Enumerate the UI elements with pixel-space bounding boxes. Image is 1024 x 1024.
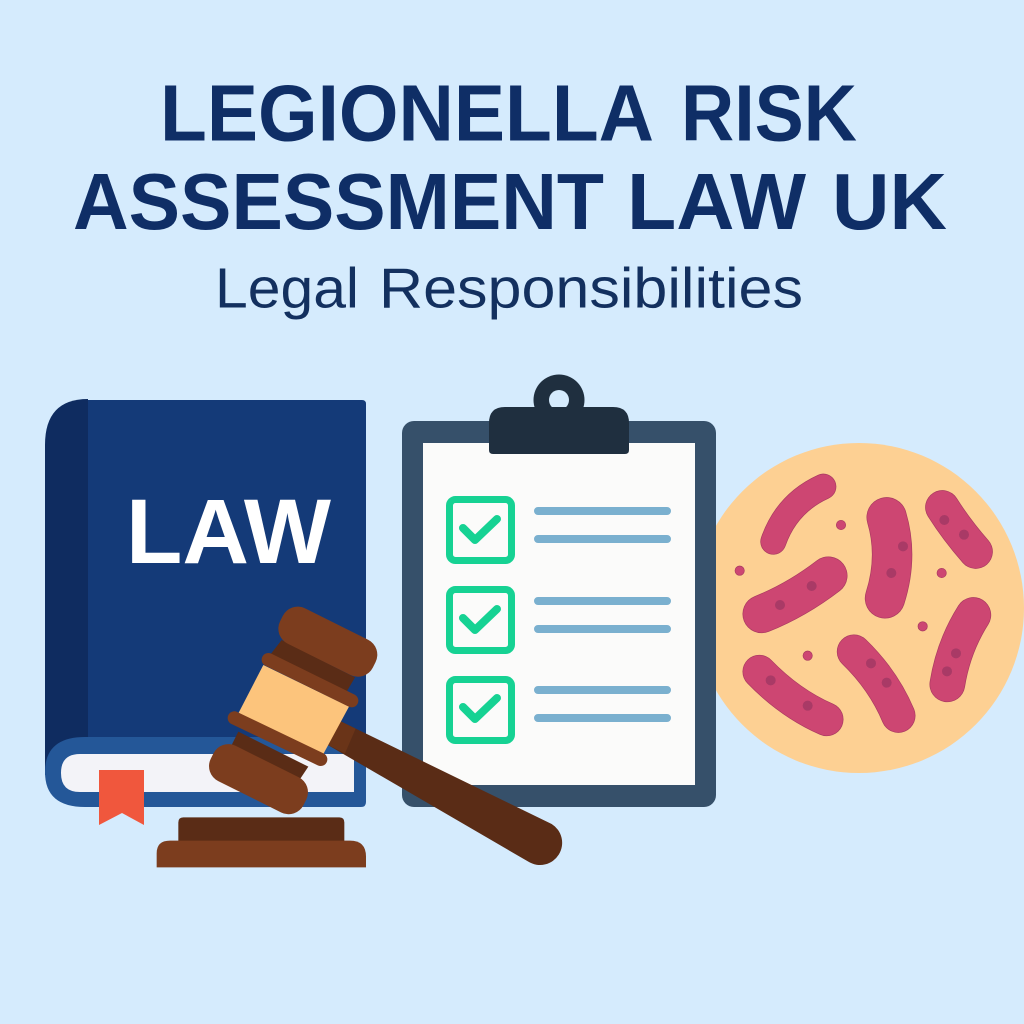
subtitle: Legal [215,256,359,320]
icon: gavel [157,601,562,867]
title: ASSESSMENT [73,157,604,246]
title: UK [832,157,947,246]
icon: law book [45,399,366,825]
title: LEGIONELLA [160,68,654,158]
title: LAW [627,157,806,246]
title [73,68,947,246]
book label: LAW [126,481,331,583]
icon: clipboard checklist [402,374,716,807]
subtitle: Responsibilities [379,256,803,320]
icon: bookmark [99,770,144,825]
title: RISK [681,68,857,158]
subtitle [215,256,803,320]
icon: bacteria circle [694,443,1024,773]
